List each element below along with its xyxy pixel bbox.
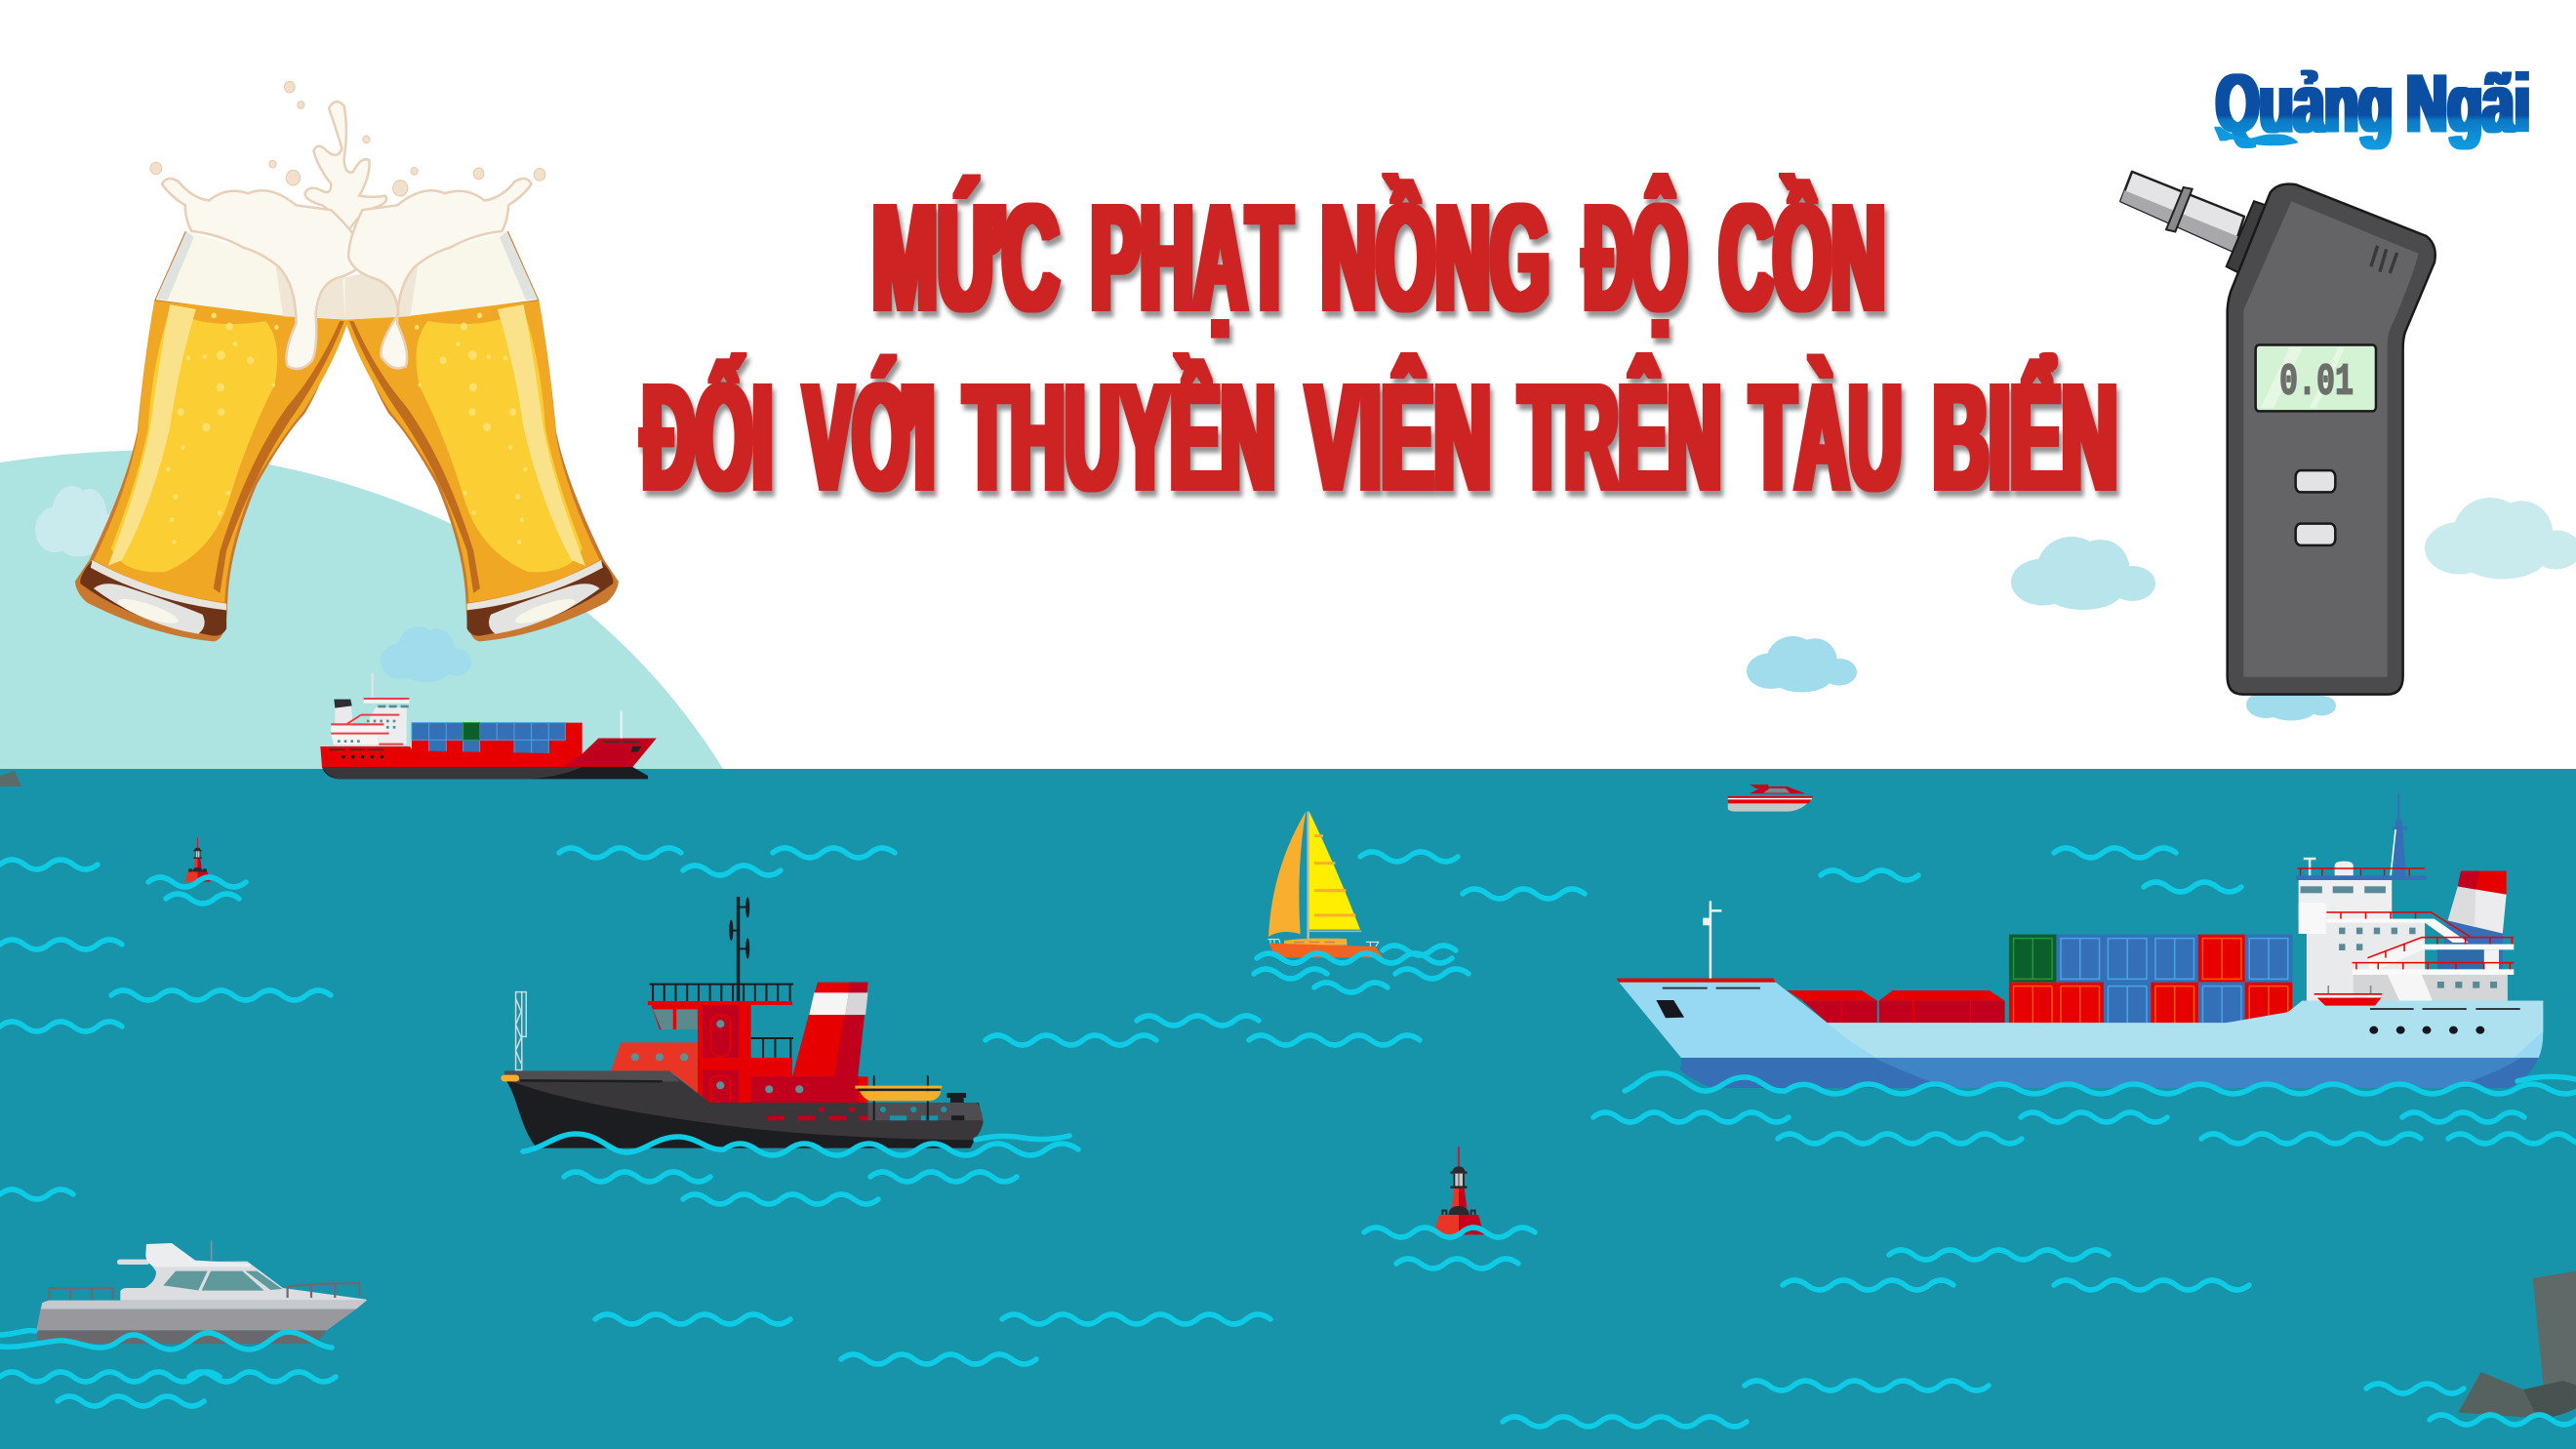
rock left xyxy=(0,771,21,786)
tugboat xyxy=(501,897,984,1148)
small buoy xyxy=(185,838,211,882)
white motor yacht xyxy=(36,1241,367,1344)
title: BIỂN xyxy=(1933,353,2117,521)
vents xyxy=(2371,246,2397,273)
large container ship xyxy=(1617,793,2543,1088)
foam droplets xyxy=(150,81,545,196)
title: ĐỐI xyxy=(642,353,773,521)
buttons xyxy=(2296,470,2335,545)
hull lower xyxy=(1680,1058,2539,1088)
portholes xyxy=(2369,1026,2484,1034)
logo: Quảng Ngãi: Quảng xyxy=(2216,58,2393,149)
funnel xyxy=(2435,871,2507,1002)
hill xyxy=(0,451,723,769)
sea background xyxy=(0,769,2576,1449)
foam splash xyxy=(162,101,532,369)
clouds xyxy=(35,486,2576,720)
display xyxy=(2256,345,2376,411)
mouthpiece tube xyxy=(2120,172,2267,273)
bow rim, window and mast xyxy=(1617,901,2520,1018)
icon: beer glasses xyxy=(75,81,619,641)
superstructure xyxy=(2296,859,2514,1002)
mast blue xyxy=(2391,793,2407,875)
sailboat xyxy=(1268,812,1383,957)
waves xyxy=(0,848,2576,1427)
title: THUYỀN xyxy=(964,353,1275,521)
wheelhouse xyxy=(611,1001,868,1103)
title: MỨC xyxy=(872,174,1059,342)
title: ĐỘ xyxy=(1584,174,1687,342)
red speedboat xyxy=(1728,785,1813,812)
title: VIÊN xyxy=(1307,353,1491,521)
title: VỚI xyxy=(804,353,935,521)
antenna mast xyxy=(729,897,749,1001)
right glass xyxy=(342,231,619,641)
left glass xyxy=(75,231,350,641)
hull lower light xyxy=(1874,1058,2521,1088)
display: 0.01 xyxy=(2279,358,2354,408)
lattice pole xyxy=(516,992,526,1070)
title: PHẠT xyxy=(1091,174,1292,342)
device face xyxy=(2243,201,2418,677)
title: CỒN xyxy=(1719,174,1885,342)
device body xyxy=(2228,184,2435,695)
hull upper xyxy=(1619,983,2543,1058)
lifeboat xyxy=(2314,986,2382,1006)
rock right xyxy=(2458,1271,2576,1418)
hull xyxy=(501,1070,984,1148)
railings xyxy=(650,985,793,1058)
large buoy xyxy=(1433,1147,1484,1234)
icon: breathalyzer xyxy=(2120,172,2435,695)
title: TÀU xyxy=(1751,353,1902,521)
title: NỒNG xyxy=(1321,174,1550,342)
title: TRÊN xyxy=(1519,353,1721,521)
funnel xyxy=(792,983,868,1076)
stacked containers xyxy=(1787,935,2292,1024)
title xyxy=(642,174,2117,521)
red container ship on horizon xyxy=(320,673,657,779)
hull upper light xyxy=(1828,1001,2543,1058)
yellow lifeboat xyxy=(855,1075,942,1120)
